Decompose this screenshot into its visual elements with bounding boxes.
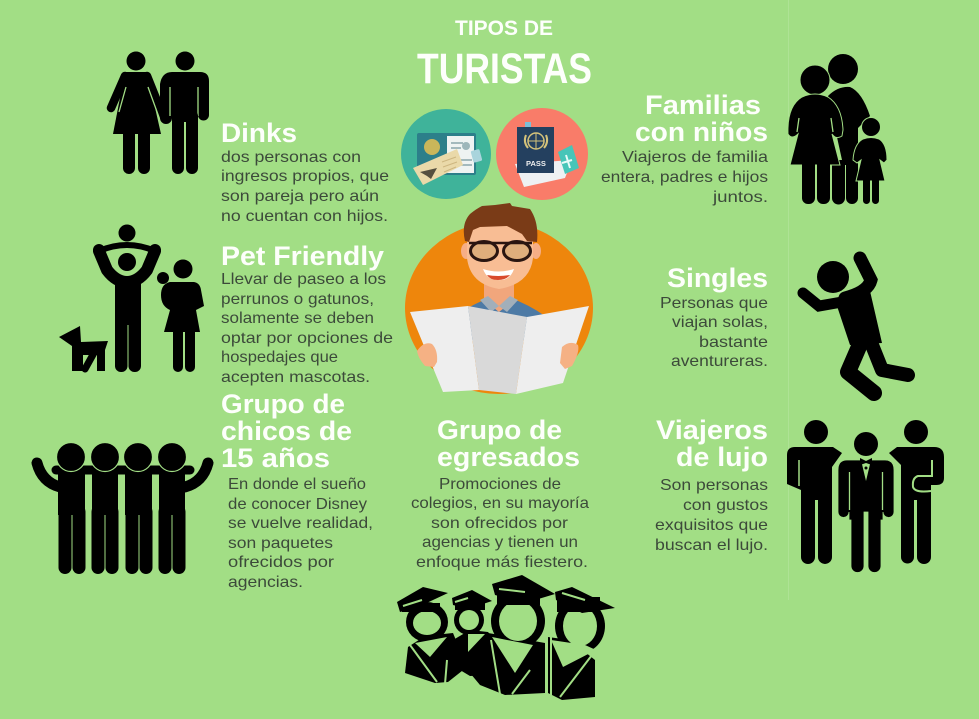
panel: Pet Friendly: solamente se deben (221, 310, 374, 327)
icon: passport badge (496, 108, 588, 200)
icon: family with dog (59, 224, 204, 372)
panel: Grupo de egresados: Grupo de (437, 415, 562, 445)
panel: Grupo de egresados: son ofrecidos por (431, 515, 569, 532)
map (410, 306, 589, 394)
panel: Singles: Singles (667, 263, 768, 293)
orange circle (405, 222, 593, 394)
panel: Pet Friendly: Llevar de paseo a los (221, 271, 386, 288)
icon: passport and ticket badge (401, 109, 491, 199)
panel: Viajeros de lujo: buscan el lujo. (655, 537, 768, 554)
panel: Familias con niños (601, 90, 768, 206)
panel: Grupo de chicos de 15 años: son paquetes (228, 535, 333, 552)
panel: Pet Friendly: acepten mascotas. (221, 369, 370, 386)
collar (480, 296, 518, 312)
ear left (461, 243, 471, 259)
panel: Dinks (221, 118, 389, 225)
icon: luxury travelers (787, 420, 944, 572)
icon: graduates (397, 575, 615, 700)
hand right (560, 343, 578, 369)
head (467, 222, 533, 289)
mouth (487, 275, 510, 280)
panel: Familias con niños: con niños (635, 117, 768, 147)
panel: Pet Friendly: Pet Friendly (221, 241, 384, 271)
icon: jumping single traveler (803, 258, 908, 393)
title (417, 17, 592, 93)
panel: Grupo de egresados: egresados (437, 442, 580, 472)
hand left (417, 343, 437, 367)
title: TIPOS DE (455, 17, 553, 40)
panel: Familias con niños: entera, padres e hijos (601, 169, 768, 186)
panel: Dinks: son pareja pero aún (221, 188, 379, 205)
panel: Pet Friendly: perrunos o gatunos, (221, 291, 374, 308)
panel: Grupo de chicos de 15 años: En donde el sueño (228, 476, 366, 493)
panel: Pet Friendly: hospedajes que (221, 349, 338, 366)
ear right (531, 243, 541, 259)
panel: Singles: bastante (699, 334, 768, 351)
panel: Familias con niños: juntos. (712, 189, 768, 206)
panel: Grupo de chicos de 15 años: agencias. (228, 574, 303, 591)
panel: Dinks: dos personas con (221, 149, 361, 166)
hair (464, 203, 537, 242)
panel: Grupo de egresados: enfoque más fiestero. (416, 554, 588, 571)
panel: Pet Friendly: optar por opciones de (221, 330, 393, 347)
panel: Dinks: ingresos propios, que (221, 168, 389, 185)
panel: Grupo de egresados: colegios, en su mayoría (411, 495, 589, 512)
panel: Viajeros de lujo: exquisitos que (655, 517, 768, 534)
panel: Singles: viajan solas, (672, 314, 768, 331)
panel: Grupo de chicos de 15 años: se vuelve realidad, (228, 515, 373, 532)
panel: Dinks: Dinks (221, 118, 297, 148)
panel: Viajeros de lujo (655, 415, 768, 554)
shirt (468, 298, 545, 340)
panel: Pet Friendly (221, 241, 393, 386)
icon: family with child (788, 54, 887, 205)
panel: Grupo de chicos de 15 años: de conocer Disney (228, 496, 367, 513)
panel: Grupo de chicos de 15 años: ofrecidos por (228, 554, 335, 571)
panel: Viajeros de lujo: con gustos (683, 497, 768, 514)
icon: couple (111, 52, 209, 174)
panel: Singles: aventureras. (671, 353, 768, 370)
panel: Familias con niños: Familias (645, 90, 761, 120)
panel: Viajeros de lujo: de lujo (676, 442, 768, 472)
panel: Dinks: no cuentan con hijos. (221, 208, 388, 225)
illustration: man reading a map (405, 203, 593, 394)
panel: Singles (660, 263, 768, 370)
panel: Viajeros de lujo: Viajeros (656, 415, 768, 445)
panel: Grupo de chicos de 15 años: 15 años (221, 443, 330, 473)
panel: Familias con niños: Viajeros de familia (622, 149, 768, 166)
panel: Singles: Personas que (660, 295, 768, 312)
title: TURISTAS (417, 45, 592, 93)
smile (483, 269, 514, 280)
panel: Grupo de chicos de 15 años: chicos de (221, 416, 352, 446)
panel: Grupo de egresados: agencias y tienen un (422, 534, 578, 551)
glasses (469, 242, 532, 260)
panel: Grupo de egresados (411, 415, 589, 571)
neck (484, 278, 514, 312)
panel: Grupo de egresados: Promociones de (439, 476, 561, 493)
icon: passport badge: PASS (526, 159, 546, 168)
panel: Grupo de chicos de 15 años (221, 389, 373, 591)
panel: Grupo de chicos de 15 años: Grupo de (221, 389, 345, 419)
panel: Viajeros de lujo: Son personas (660, 477, 768, 494)
icon: group of four friends (37, 442, 208, 574)
